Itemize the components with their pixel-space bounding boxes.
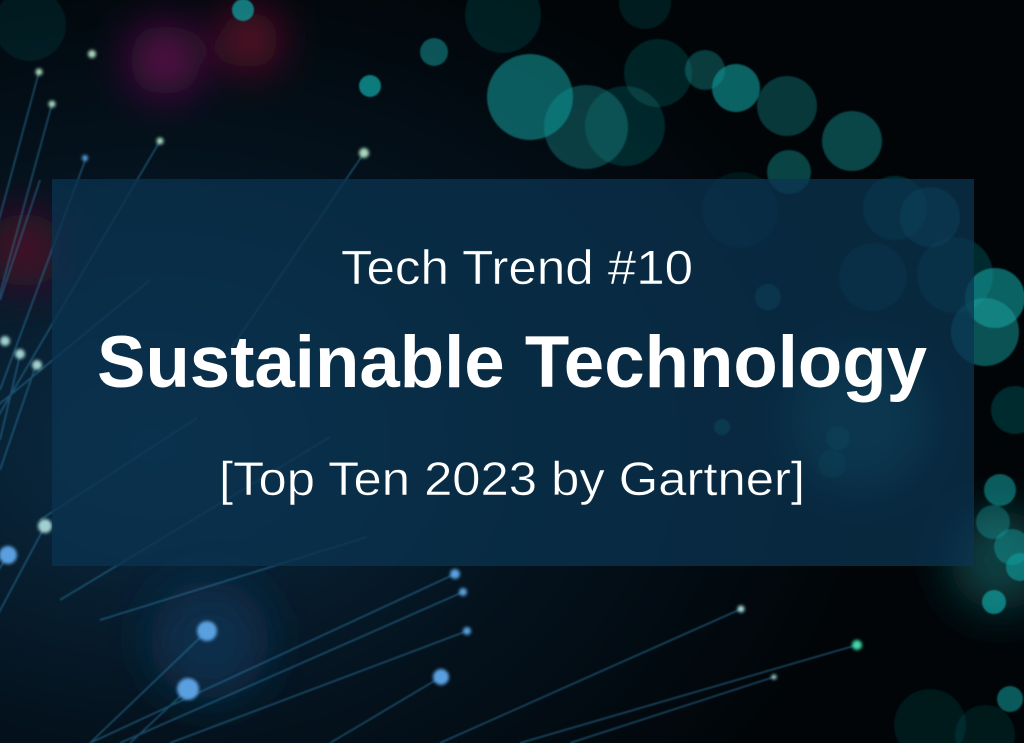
title: Sustainable Technology: Sustainable Technology xyxy=(97,322,927,403)
background: fibre tips xyxy=(0,50,862,700)
panel: title backdrop xyxy=(52,179,974,566)
text: Tech Trend #10: Tech Trend #10 xyxy=(341,242,693,295)
text: Top Ten 2023 by Gartner: [Top Ten 2023 by Gartner] xyxy=(219,452,805,505)
background: optical fibres xyxy=(0,72,857,743)
